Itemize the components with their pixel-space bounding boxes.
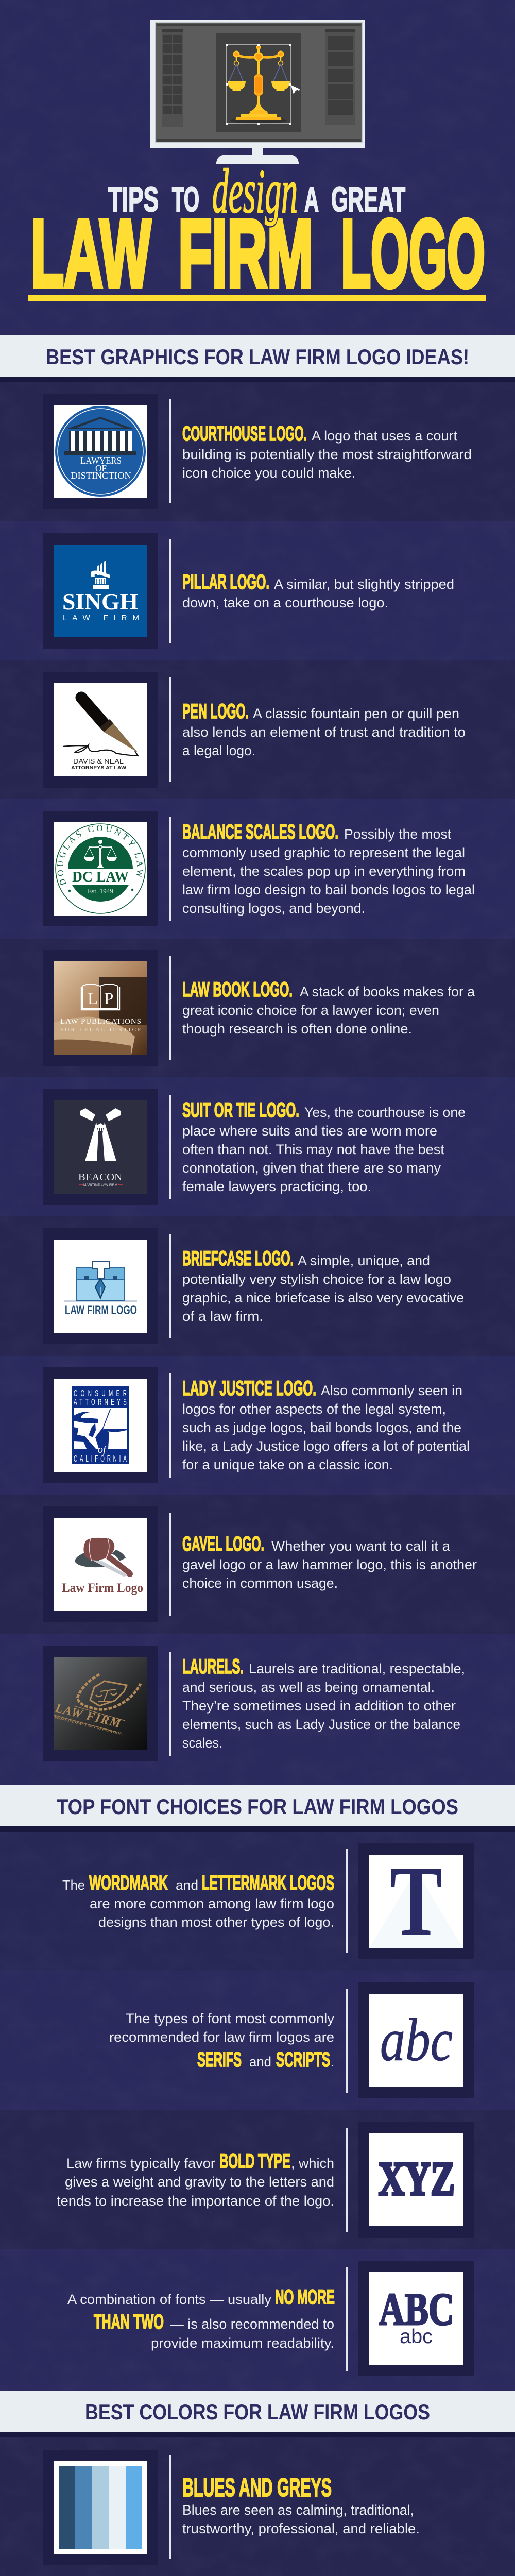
logo: consumer attorneys of california: ATTORNEYS <box>74 1397 127 1408</box>
text block: often than not. This may not have the best <box>182 1142 444 1157</box>
text block: are more common among law firm logo <box>90 1896 334 1911</box>
row: wordmark and lettermark <box>62 1843 474 1959</box>
logo: law publications photo: LAW PUBLICATIONS <box>60 1018 141 1026</box>
text block: Possibly the most <box>344 826 451 842</box>
text block: commonly used graphic to represent the legal <box>182 845 465 860</box>
text block: for a unique take on a classic icon. <box>182 1457 393 1472</box>
row: pillar logo <box>43 533 454 649</box>
text block: law firm logo design to bail bonds logos to legal <box>182 882 475 897</box>
sample: bold XYZ: XYZ <box>379 2153 455 2205</box>
text block <box>182 1247 464 1324</box>
title: design <box>212 157 298 226</box>
text block <box>182 978 475 1037</box>
logo: dc law <box>55 823 146 914</box>
title: TIPS <box>108 180 159 219</box>
text block: LAW BOOK LOGO. <box>182 978 293 1001</box>
logo: briefcase: LAW FIRM LOGO <box>65 1303 137 1317</box>
text block <box>57 2150 334 2209</box>
logo: gavel <box>62 1538 143 1595</box>
text block: SERIFS <box>197 2048 242 2071</box>
text block <box>62 1872 334 1930</box>
text block: PEN LOGO. <box>182 700 249 723</box>
text block: great iconic choice for a lawyer icon; even <box>182 1003 439 1018</box>
row: gavel logo <box>43 1506 477 1622</box>
text block: graphic, a nice briefcase is also very evocative <box>182 1290 464 1306</box>
text block <box>182 821 475 916</box>
row: blues and greys <box>43 2450 420 2565</box>
text block: icon choice you could make. <box>182 465 355 481</box>
logo: consumer attorneys of california: of <box>98 1444 107 1455</box>
text block: logos for other aspects of the legal system, <box>182 1401 446 1417</box>
text block <box>182 2473 420 2536</box>
text block: A combination of fonts — usually <box>67 2292 271 2307</box>
text block: A simple, unique, and <box>298 1253 430 1268</box>
text block: Also commonly seen in <box>321 1383 462 1398</box>
text block: building is potentially the most straightforward <box>182 447 472 462</box>
logo: davis and neal pen: DAVIS & NEAL <box>73 757 124 765</box>
text block <box>182 1533 477 1591</box>
text block: . <box>331 2054 335 2070</box>
logo: lawyers of distinction <box>56 406 145 496</box>
palette: blues <box>59 2466 142 2549</box>
title: FIRM <box>178 200 313 307</box>
text block: down, take on a courthouse logo. <box>182 595 388 611</box>
row: serifs and scripts <box>109 1982 474 2098</box>
text block: like, a Lady Justice logo offers a lot of potential <box>182 1438 470 1454</box>
text block: LAURELS. <box>182 1655 244 1678</box>
text block: SUIT OR TIE LOGO. <box>182 1099 299 1122</box>
text block: COURTHOUSE LOGO. <box>182 422 307 445</box>
logo: consumer attorneys of california: CONSUMER <box>74 1388 127 1399</box>
text block: THAN TWO <box>94 2311 164 2333</box>
title <box>28 157 486 307</box>
logo: lawyers of distinction: LAWYERS <box>80 455 122 466</box>
text block: NO MORE <box>275 2286 335 2309</box>
section heading: best colors: BEST COLORS FOR LAW FIRM LOGOS <box>85 2400 430 2424</box>
row: briefcase logo <box>43 1228 464 1344</box>
text block: BRIEFCASE LOGO. <box>182 1247 294 1270</box>
text block <box>182 422 472 481</box>
section heading: top font choices: TOP FONT CHOICES FOR LAW FIRM LOGOS <box>57 1794 458 1819</box>
text block: element, the scales pop up in everything from <box>182 863 466 879</box>
logo: laurel law firm: PROFESSIONAL LAW CORPORATION <box>54 1715 123 1736</box>
logo: davis and neal pen <box>63 698 138 771</box>
text block: and serious, as well as being ornamental. <box>182 1680 435 1695</box>
text block: GAVEL LOGO. <box>182 1533 264 1555</box>
logo: laurel law firm <box>54 1657 147 1750</box>
text block: place where suits and ties are worn more <box>182 1123 437 1139</box>
text block: Blues are seen as calming, traditional, <box>182 2502 414 2518</box>
title: design <box>212 157 298 226</box>
text block <box>182 700 466 758</box>
logo: singh law firm: LAW FIRM <box>62 614 139 622</box>
text block: and <box>176 1877 198 1893</box>
text block: designs than most other types of logo. <box>98 1914 334 1930</box>
text block: , which <box>291 2156 334 2171</box>
logo: dc law: Est. 1949 <box>88 887 113 895</box>
row: no more than two fonts <box>67 2261 474 2376</box>
title: TO <box>172 180 199 219</box>
logo: briefcase <box>64 1262 137 1317</box>
text block: The types of font most commonly <box>126 2011 334 2026</box>
section heading: best colors <box>0 2391 515 2437</box>
logo: consumer attorneys of california <box>72 1386 129 1464</box>
logo: beacon: BEACON <box>78 1172 122 1183</box>
row: laurels <box>43 1646 465 1761</box>
row: law book logo <box>43 950 475 1066</box>
logo: lawyers of distinction: OF <box>95 463 107 473</box>
text block: PILLAR LOGO. <box>182 571 269 594</box>
text block: A logo that uses a court <box>312 428 457 444</box>
section heading: best graphics <box>0 335 515 382</box>
text block: recommended for law firm logos are <box>109 2029 334 2045</box>
logo: dc law: DOUGLAS COUNTY LAW <box>57 825 143 886</box>
sample: ABC abc: abc <box>400 2326 433 2348</box>
text block: A similar, but slightly stripped <box>274 577 454 592</box>
text block: a legal logo. <box>182 743 255 758</box>
text block: A classic fountain pen or quill pen <box>253 706 459 721</box>
logo: singh law firm <box>62 561 139 622</box>
logo: law publications photo <box>54 961 147 1055</box>
text block: female lawyers practicing, too. <box>182 1179 371 1194</box>
text block: Law firms typically favor <box>66 2156 215 2171</box>
text block <box>182 571 454 611</box>
text block: of a law firm. <box>182 1309 263 1324</box>
text block: provide maximum readability. <box>151 2335 334 2351</box>
text block: gavel logo or a law hammer logo, this is another <box>182 1557 477 1572</box>
logo: beacon: MARITIME LAW FIRM <box>83 1183 117 1187</box>
logo: law publications photo: FOR LEGAL JUSTICE <box>60 1027 141 1033</box>
logo: law publications photo: P <box>104 990 113 1008</box>
text block: Whether you want to call it a <box>271 1538 451 1554</box>
text block: — is also recommended to <box>170 2316 334 2332</box>
row: suit or tie logo <box>43 1089 466 1205</box>
row: lady justice logo <box>43 1367 470 1483</box>
row: balance scales logo <box>43 811 475 926</box>
icon: computer monitor with scales of justice <box>150 20 365 164</box>
text block: LETTERMARK LOGOS <box>202 1872 334 1894</box>
section heading: top font choices <box>0 1785 515 1832</box>
text block: choice in common usage. <box>182 1575 338 1591</box>
text block: consulting logos, and beyond. <box>182 901 365 916</box>
sample: script abc: abc <box>380 2006 453 2074</box>
text block: tends to increase the importance of the logo. <box>57 2193 334 2209</box>
text block: BLUES AND GREYS <box>182 2473 332 2502</box>
text block: A stack of books makes for a <box>300 984 475 999</box>
sample: ABC abc <box>379 2284 454 2348</box>
text block: Laurels are traditional, respectable, <box>249 1661 465 1676</box>
logo: davis and neal pen: ATTORNEYS AT LAW <box>71 765 126 771</box>
text block: SCRIPTS <box>276 2048 330 2071</box>
text block: Yes, the courthouse is one <box>304 1105 466 1120</box>
text block: though research is often done online. <box>182 1021 412 1037</box>
text block: such as judge logos, bail bonds logos, and the <box>182 1420 461 1435</box>
logo: laurel law firm: LAW FIRM <box>54 1701 123 1731</box>
sample: serif letter T: T <box>390 1845 442 1957</box>
text block: potentially very stylish choice for a law logo <box>182 1272 451 1287</box>
text block: BOLD TYPE <box>219 2150 290 2173</box>
text block: They’re sometimes used in addition to other <box>182 1698 456 1714</box>
text block <box>182 1377 470 1472</box>
text block <box>182 1655 465 1751</box>
text block: also lends an element of trust and tradition to <box>182 724 466 740</box>
text block: elements, such as Lady Justice or the balance <box>182 1717 460 1732</box>
title: LAW <box>31 200 151 307</box>
logo: dc law: DC LAW <box>72 869 129 885</box>
text block: BALANCE SCALES LOGO. <box>182 821 338 843</box>
text block: trustworthy, professional, and reliable. <box>182 2521 420 2536</box>
logo: gavel: Law Firm Logo <box>62 1581 143 1595</box>
row: pen logo <box>43 672 466 788</box>
logo: beacon <box>78 1108 123 1187</box>
row: courthouse logo <box>43 394 472 509</box>
text block: connotation, given that there are so many <box>182 1160 441 1176</box>
logo: consumer attorneys of california: CALIFORNIA <box>74 1454 127 1464</box>
title: A <box>304 180 319 219</box>
text block <box>67 2286 335 2351</box>
logo: singh law firm: SINGH <box>62 589 138 615</box>
text block: gives a weight and gravity to the letters and <box>65 2174 334 2190</box>
text block: scales. <box>182 1735 222 1751</box>
logo: lawyers of distinction: DISTINCTION <box>71 470 131 481</box>
text block: and <box>249 2054 271 2070</box>
row: bold type <box>57 2122 474 2238</box>
logo: law publications photo: L <box>88 990 98 1008</box>
title: GREAT <box>331 180 405 219</box>
text block: WORDMARK <box>89 1872 168 1894</box>
text block <box>109 2011 335 2071</box>
text block <box>182 1099 466 1194</box>
text block: LADY JUSTICE LOGO. <box>182 1377 316 1400</box>
text block: The <box>62 1877 85 1893</box>
sample: ABC abc: ABC <box>379 2284 454 2335</box>
